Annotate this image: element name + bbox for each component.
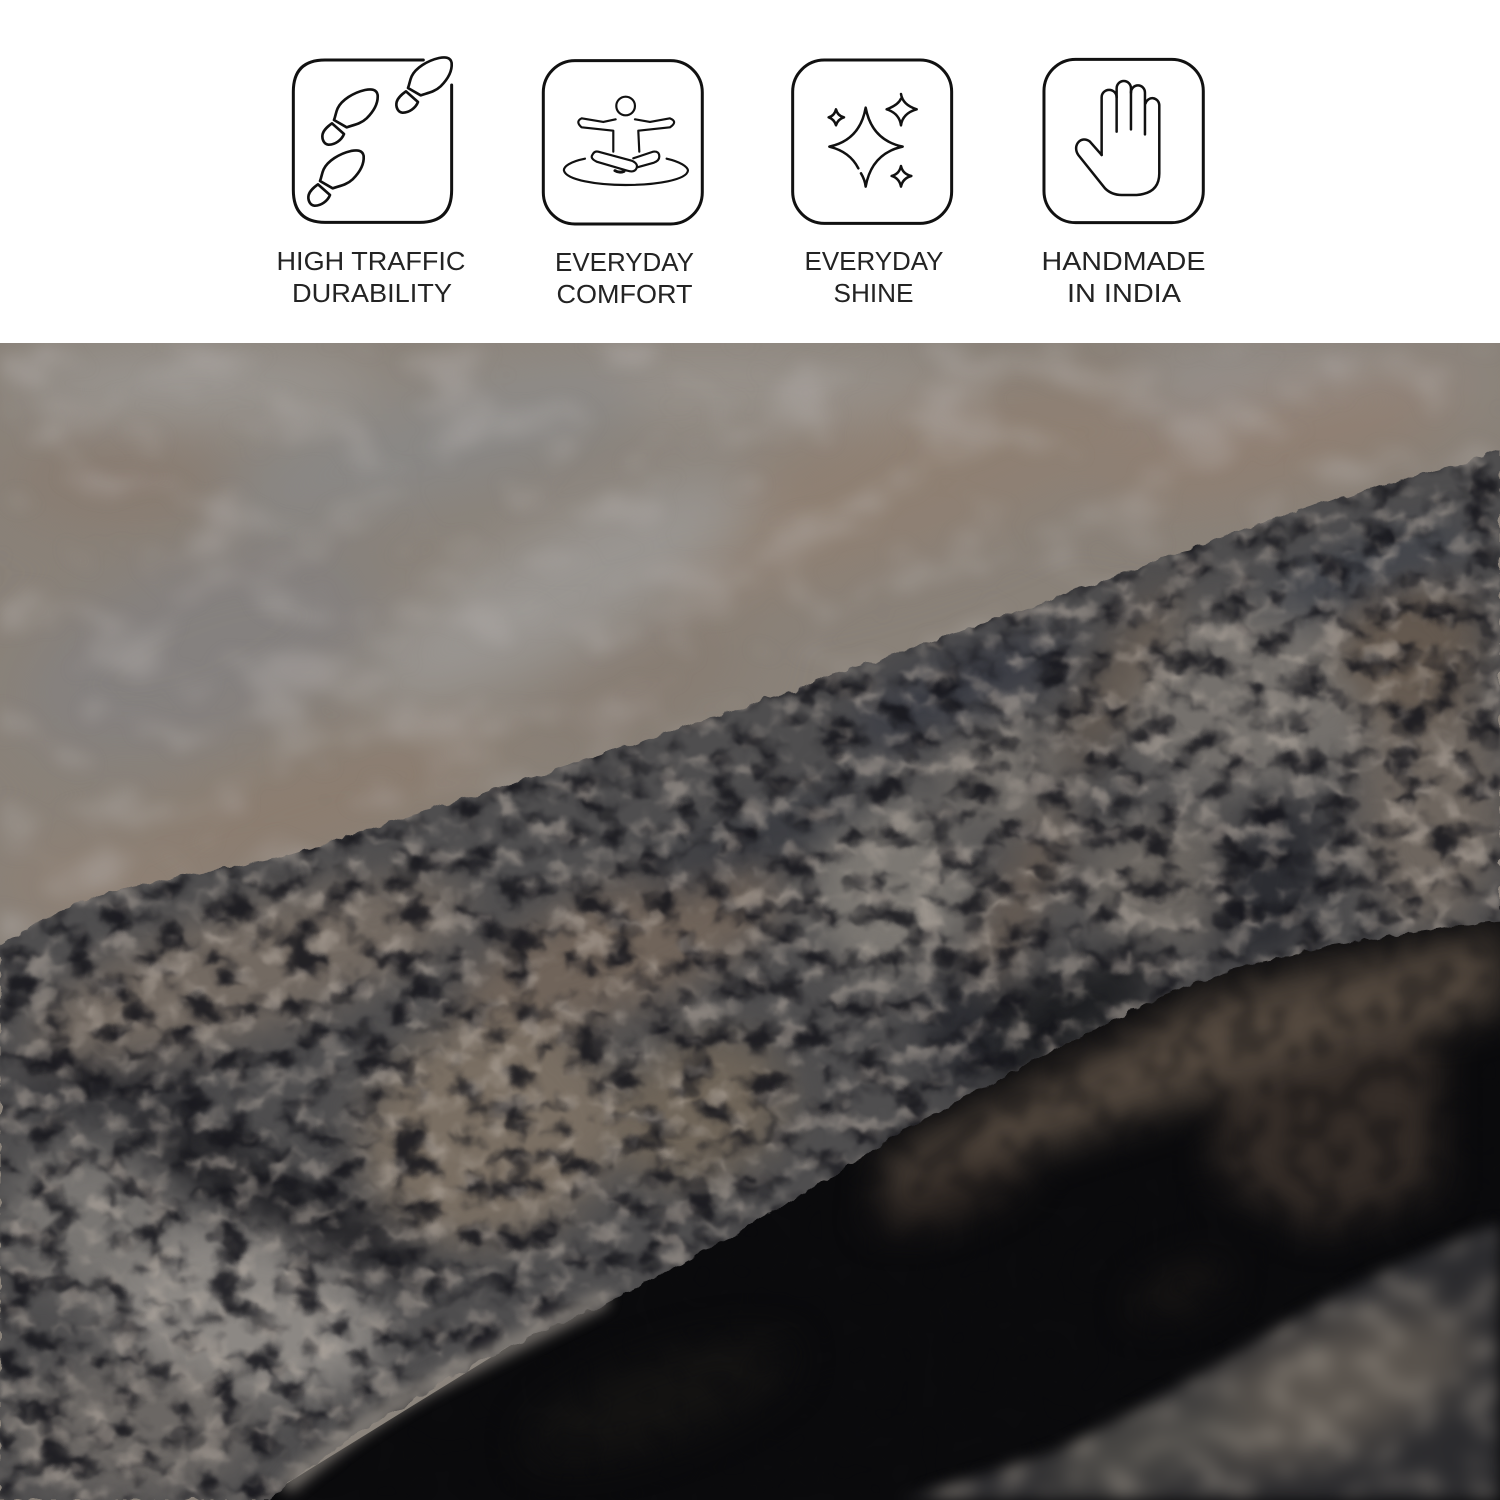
lighter pile fringe on the roll edge — [290, 1300, 600, 1482]
icon: sparkles — [793, 60, 952, 223]
label: handmade in india — [1042, 246, 1206, 308]
feature labels — [276, 246, 1206, 309]
label: everyday shine — [804, 246, 944, 308]
out-of-focus pile, bottom right — [914, 1222, 1500, 1500]
icon row — [293, 57, 1203, 224]
icon: raised hand — [1044, 59, 1203, 223]
label: high traffic durability: DURABILITY — [292, 278, 452, 308]
label: high traffic durability: HIGH TRAFFIC — [276, 246, 466, 276]
roll colour patches — [5, 509, 1500, 1495]
photo: rug close-up — [0, 334, 1500, 1500]
dark underside of the rug — [260, 905, 1500, 1500]
label: everyday comfort — [555, 247, 694, 309]
mottling on the brown band — [896, 940, 1490, 1216]
label: handmade in india: IN INDIA — [1067, 278, 1182, 308]
label: handmade in india: HANDMADE — [1042, 246, 1206, 276]
label: everyday shine: EVERYDAY — [804, 246, 944, 276]
blurred rug background — [30, 343, 1336, 836]
pile texture — [0, 440, 1500, 1500]
label: everyday comfort: COMFORT — [556, 279, 693, 309]
blurred streaks — [0, 343, 1500, 983]
icon: seated figure on rug — [543, 61, 702, 224]
label: everyday shine: SHINE — [834, 278, 914, 308]
label: everyday comfort: EVERYDAY — [555, 247, 694, 277]
icon: footprints — [293, 57, 452, 222]
label: high traffic durability — [276, 246, 466, 308]
rug roll — [0, 440, 1500, 1500]
